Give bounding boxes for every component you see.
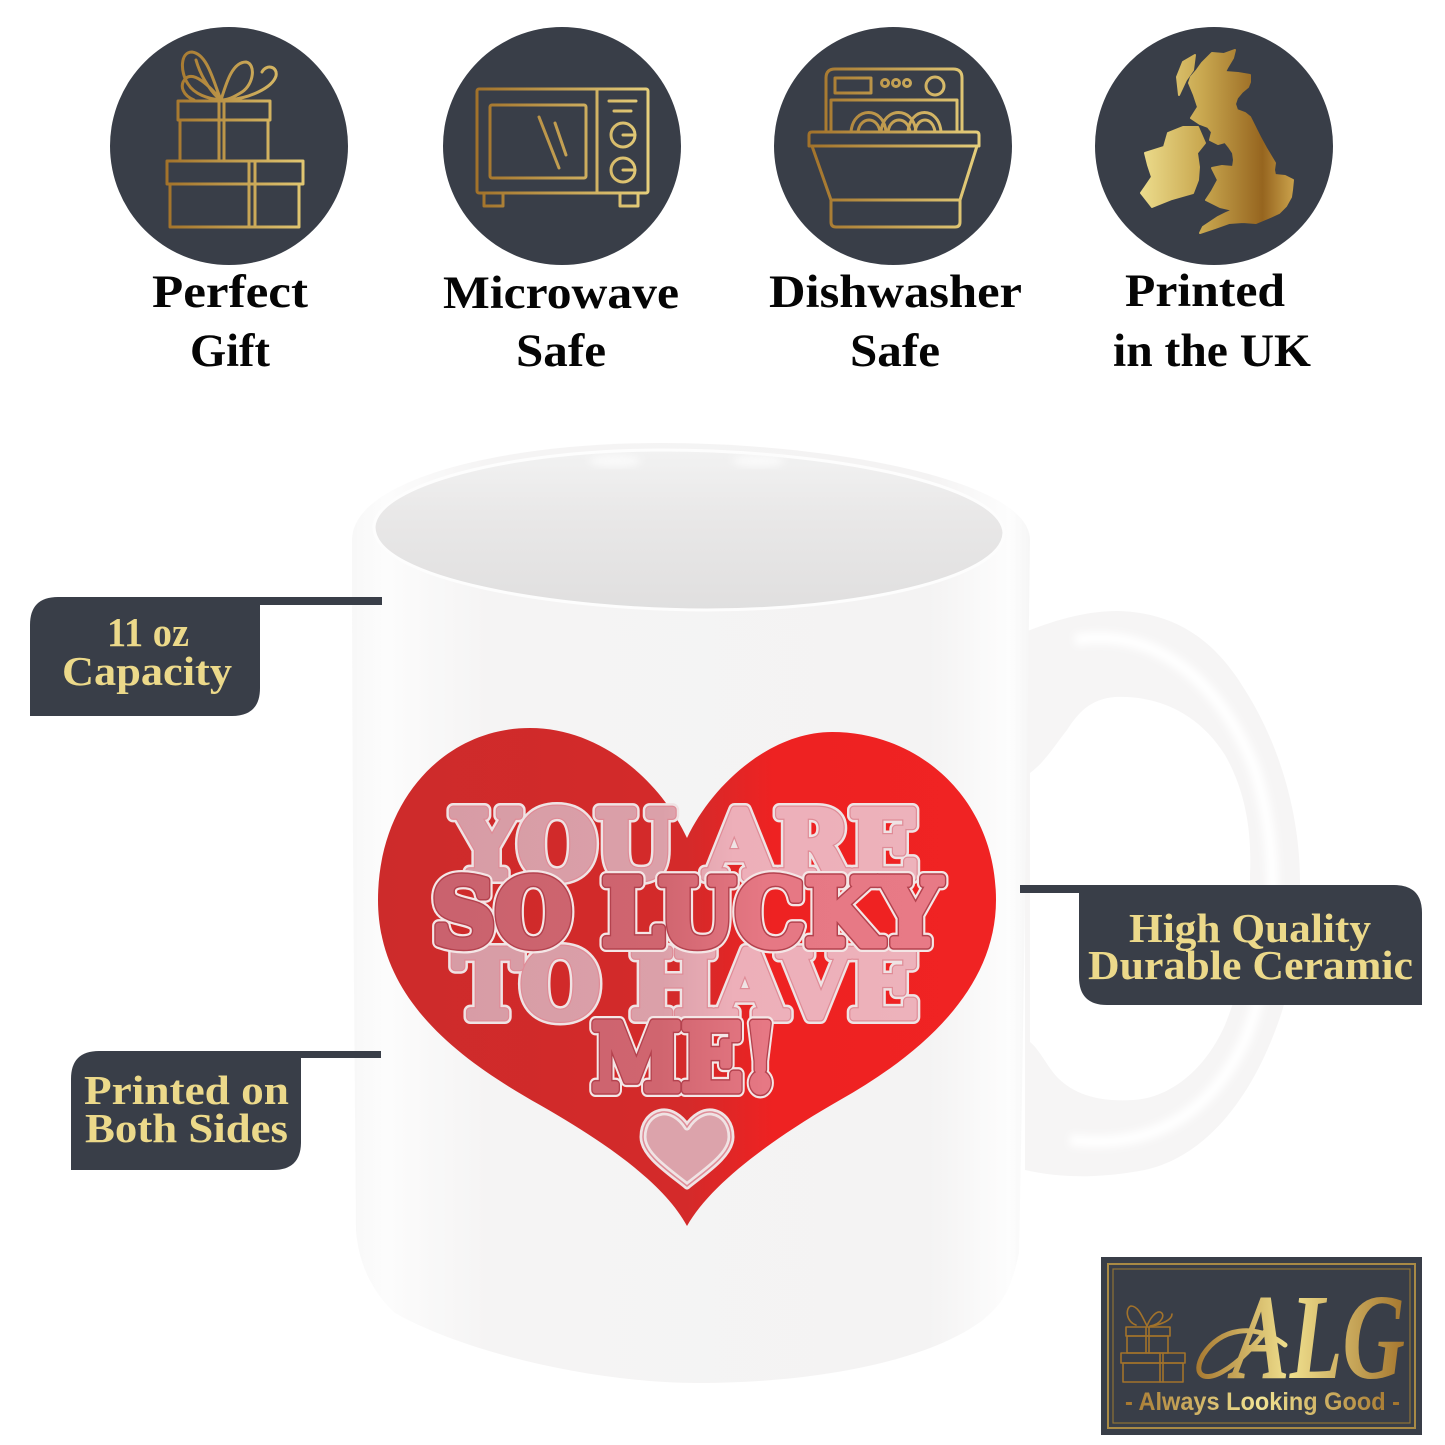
mug inner opening [374,450,1004,610]
slogan line: to have: TO HAVE [454,931,918,1039]
label: dishwasher safe: Safe [850,325,940,377]
logo gift icon [1121,1306,1185,1382]
slogan line: so lucky: SO LUCKY [432,859,942,967]
callout: 11 oz capacity: 11 oz [107,609,189,655]
label: printed in the UK: in the UK [1113,325,1311,377]
icon circle: perfect gift [110,27,348,265]
label: dishwasher safe: Dishwasher [769,266,1022,318]
callout: high quality durable ceramic [1020,885,1422,1005]
slogan line: me: ME! [592,1004,778,1112]
slogan line: to have: TO HAVE [454,931,918,1039]
icon: dishwasher [809,69,979,227]
label: printed in the UK [1113,265,1311,377]
callout: high quality durable ceramic: High Quality [1129,905,1372,951]
callout: printed on both sides [71,1051,381,1170]
label: perfect gift: Gift [190,325,270,377]
small pink heart [643,1112,731,1186]
mug body [352,443,1030,1383]
label: microwave safe: Safe [516,325,606,377]
label: dishwasher safe [769,266,1022,377]
callout: printed on both sides: Printed on [84,1067,289,1113]
slogan line: me: ME! [592,1004,778,1112]
callout: printed on both sides: Both Sides [85,1105,288,1151]
slogan line: me: ME! [592,1004,778,1112]
slogan line: to have: TO HAVE [454,931,918,1039]
icon: map of the UK and Ireland [1141,50,1293,233]
label: printed in the UK: Printed [1125,265,1285,317]
slogan line: you are: YOU ARE [453,791,918,899]
logo tagline: - Always Looking Good - [1125,1388,1400,1416]
brand logo: always looking good [1101,1257,1422,1435]
icon circle: printed in the UK [1095,27,1333,265]
callout: high quality durable ceramic: Durable Ceramic [1088,942,1413,988]
label: perfect gift: Perfect [152,266,308,318]
heart print [378,728,996,1226]
slogan line: you are: YOU ARE [453,791,918,899]
icon circle: microwave [443,27,681,265]
slogan line: so lucky: SO LUCKY [432,859,942,967]
callout: 11 oz capacity [30,597,382,716]
slogan line: so lucky: SO LUCKY [432,859,942,967]
icon: stacked gift boxes [167,52,303,227]
logo swash [1199,1328,1285,1377]
icon circle: dishwasher [774,27,1012,265]
slogan text [432,791,942,1112]
icon: microwave oven [477,89,648,206]
label: microwave safe [443,267,679,377]
callout: 11 oz capacity: Capacity [62,648,233,694]
label: perfect gift [152,266,308,377]
slogan line: you are: YOU ARE [453,791,918,899]
mug handle [1025,611,1300,1176]
label: microwave safe: Microwave [443,267,679,319]
